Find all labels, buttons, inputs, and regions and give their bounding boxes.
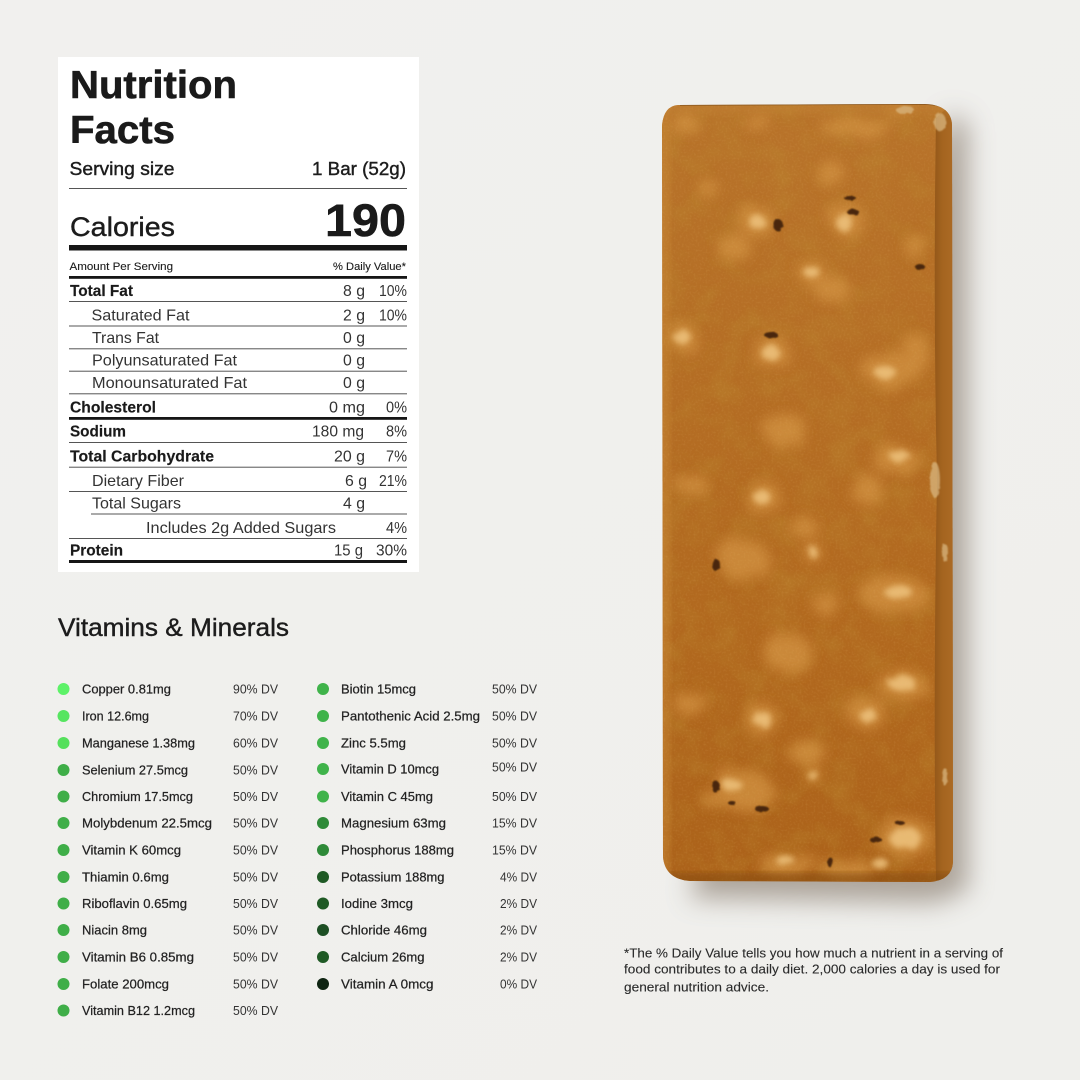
copper <box>58 682 279 696</box>
row: dietary fiber: 21% <box>379 473 407 490</box>
footnote: general nutrition advice. <box>624 980 769 994</box>
serving size <box>70 159 406 179</box>
row: monounsaturated fat: 0 g <box>343 375 365 392</box>
footnote: *The % Daily Value tells you how much a nutrient in a serving of <box>624 946 1004 960</box>
vitamin b6: 50% DV <box>233 950 279 964</box>
column headers: Amount Per Serving <box>70 261 173 273</box>
row: total carbohydrate: 7% <box>386 448 407 466</box>
row: monounsaturated fat <box>92 375 365 392</box>
row: protein: Protein <box>70 542 123 560</box>
row: trans fat: Trans Fat <box>92 330 160 347</box>
row: added sugars: 4% <box>386 520 407 537</box>
folate: 50% DV <box>233 978 279 992</box>
row: polyunsaturated fat: 0 g <box>343 352 365 370</box>
vitamin c <box>317 790 538 804</box>
chromium: 50% DV <box>233 790 279 804</box>
title <box>70 64 237 152</box>
row: total fat <box>70 283 407 300</box>
magnesium: Magnesium 63mg <box>341 816 446 830</box>
calcium <box>317 950 538 964</box>
row: polyunsaturated fat <box>92 352 365 370</box>
column headers: % Daily Value* <box>333 261 407 273</box>
biotin <box>317 682 538 696</box>
vitamin k: 50% DV <box>233 844 279 858</box>
panel: nutrition facts label <box>58 57 419 572</box>
vitamin c: 50% DV <box>492 790 538 804</box>
iron: 70% DV <box>233 710 279 724</box>
pantothenic acid <box>317 710 538 724</box>
selenium: Selenium 27.5mcg <box>82 764 188 778</box>
vitamin b6: Vitamin B6 0.85mg <box>82 950 194 964</box>
chromium <box>58 790 279 804</box>
row: total sugars: Total Sugars <box>92 496 181 512</box>
manganese: 60% DV <box>233 736 279 750</box>
potassium: Potassium 188mg <box>341 870 445 884</box>
row: saturated fat: 2 g <box>343 308 365 324</box>
vitamin k: Vitamin K 60mcg <box>82 844 181 858</box>
riboflavin <box>58 897 279 911</box>
copper: Copper 0.81mg <box>82 682 171 696</box>
row: total carbohydrate <box>70 448 407 466</box>
folate: Folate 200mcg <box>82 978 169 992</box>
row: dietary fiber <box>92 473 407 490</box>
iodine: 2% DV <box>500 897 538 911</box>
chloride: Chloride 46mg <box>341 924 427 938</box>
calcium: Calcium 26mg <box>341 950 425 964</box>
molybdenum: Molybdenum 22.5mcg <box>82 816 212 830</box>
vitamin b12 <box>58 1004 279 1018</box>
potassium <box>317 870 538 884</box>
selenium: 50% DV <box>233 764 279 778</box>
phosphorus: Phosphorus 188mg <box>341 844 454 858</box>
row: sodium: Sodium <box>70 424 126 440</box>
zinc: 50% DV <box>492 736 538 750</box>
vitamin a: Vitamin A 0mcg <box>341 978 434 992</box>
title: Facts <box>70 109 175 152</box>
pantothenic acid: Pantothenic Acid 2.5mg <box>341 710 480 724</box>
calories: 190 <box>325 195 406 246</box>
vitamin d: Vitamin D 10mcg <box>341 762 439 776</box>
row: cholesterol <box>70 400 407 416</box>
heading: vitamins and minerals: Vitamins & Minerals <box>58 614 289 642</box>
row: protein: 30% <box>376 542 407 560</box>
vitamin b12: Vitamin B12 1.2mcg <box>82 1004 195 1018</box>
vitamins list: right column <box>317 682 538 992</box>
row: total carbohydrate: Total Carbohydrate <box>70 448 214 466</box>
potassium: 4% DV <box>500 870 538 884</box>
chloride: 2% DV <box>500 924 538 938</box>
row: protein: 15 g <box>334 542 363 560</box>
row: protein <box>70 542 407 560</box>
row: total carbohydrate: 20 g <box>334 448 365 466</box>
calories: Calories <box>70 212 175 242</box>
row: monounsaturated fat: Monounsaturated Fat <box>92 375 248 392</box>
row: total sugars: 4 g <box>343 496 365 512</box>
row: sodium: 8% <box>386 424 407 440</box>
phosphorus: 15% DV <box>492 844 538 858</box>
manganese: Manganese 1.38mg <box>82 736 195 750</box>
folate <box>58 978 279 992</box>
title: Nutrition <box>70 64 237 107</box>
vitamin a: 0% DV <box>500 978 538 992</box>
molybdenum <box>58 816 279 830</box>
vitamin b6 <box>58 950 279 964</box>
row: saturated fat: 10% <box>379 308 407 324</box>
phosphorus <box>317 844 538 858</box>
vitamin k <box>58 844 279 858</box>
vitamin b12: 50% DV <box>233 1004 279 1018</box>
biotin: Biotin 15mcg <box>341 682 416 696</box>
row: total sugars <box>92 496 365 512</box>
niacin: Niacin 8mg <box>82 924 147 938</box>
chromium: Chromium 17.5mcg <box>82 790 193 804</box>
vitamin c: Vitamin C 45mg <box>341 790 433 804</box>
vitamins list: left column <box>58 682 279 1018</box>
chloride <box>317 924 538 938</box>
riboflavin: Riboflavin 0.65mg <box>82 897 187 911</box>
row: saturated fat <box>92 308 407 324</box>
thiamin: 50% DV <box>233 870 279 884</box>
vitamin d: 50% DV <box>492 760 538 774</box>
biotin: 50% DV <box>492 682 538 696</box>
calcium: 2% DV <box>500 950 538 964</box>
row: added sugars: Includes 2g Added Sugars <box>146 520 336 537</box>
riboflavin: 50% DV <box>233 897 279 911</box>
manganese <box>58 736 279 750</box>
serving size: 1 Bar (52g) <box>312 159 406 179</box>
copper: 90% DV <box>233 682 279 696</box>
molybdenum: 50% DV <box>233 816 279 830</box>
vitamin d <box>317 760 538 776</box>
row: total fat: 10% <box>379 283 407 300</box>
niacin: 50% DV <box>233 924 279 938</box>
magnesium <box>317 816 538 830</box>
row: cholesterol: 0 mg <box>329 400 365 416</box>
row: saturated fat: Saturated Fat <box>92 308 190 324</box>
row: trans fat <box>92 330 365 347</box>
footnote: food contributes to a daily diet. 2,000 calories a day is used for <box>624 962 1000 976</box>
row: sodium: 180 mg <box>312 424 364 440</box>
row: polyunsaturated fat: Polyunsaturated Fat <box>92 352 238 370</box>
pantothenic acid: 50% DV <box>492 710 538 724</box>
iron: Iron 12.6mg <box>82 710 149 724</box>
row: dietary fiber: 6 g <box>345 473 367 490</box>
row: dietary fiber: Dietary Fiber <box>92 473 185 490</box>
row: sodium <box>70 424 407 440</box>
row: total fat: Total Fat <box>70 283 133 300</box>
zinc <box>317 736 538 750</box>
niacin <box>58 924 279 938</box>
calories <box>70 195 406 246</box>
illustration: protein bar <box>658 100 968 903</box>
iodine: Iodine 3mcg <box>341 897 413 911</box>
iron <box>58 710 279 724</box>
serving size: Serving size <box>70 159 174 179</box>
row: cholesterol: Cholesterol <box>70 400 156 416</box>
magnesium: 15% DV <box>492 816 538 830</box>
selenium <box>58 764 279 778</box>
footnote <box>624 946 1004 994</box>
thiamin: Thiamin 0.6mg <box>82 870 169 884</box>
row: trans fat: 0 g <box>343 330 365 347</box>
thiamin <box>58 870 279 884</box>
zinc: Zinc 5.5mg <box>341 736 406 750</box>
row: cholesterol: 0% <box>386 400 407 416</box>
iodine <box>317 897 538 911</box>
vitamin a <box>317 978 538 992</box>
row: total fat: 8 g <box>343 283 365 300</box>
column headers <box>70 261 407 273</box>
